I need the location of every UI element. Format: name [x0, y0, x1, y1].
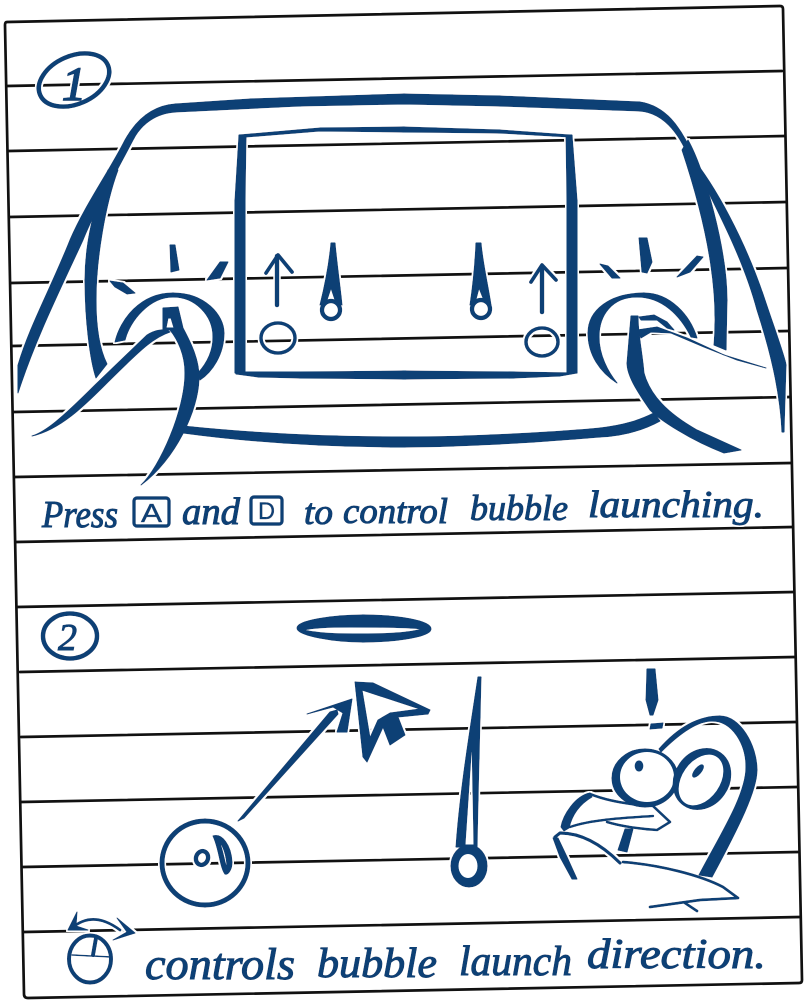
caption: controls bubble launch direction: controls	[145, 940, 295, 989]
panel 2: aiming with the mouse	[43, 614, 766, 989]
startled penguin character	[553, 716, 757, 911]
launcher needle	[451, 677, 487, 887]
caption: press A and D: control	[343, 491, 448, 531]
left bubble	[261, 323, 295, 353]
step number 2	[43, 614, 97, 659]
aiming arrow	[238, 699, 352, 821]
caption: press A and D: bubble	[470, 488, 568, 528]
caption: press A and D: A	[141, 498, 163, 528]
icon: mouse with left-right arrows	[68, 912, 135, 982]
large bubble	[162, 821, 248, 905]
caption: controls bubble launch direction: launch	[459, 939, 572, 985]
panel 1: console controls	[18, 43, 786, 536]
caption: controls bubble launch direction: direction.	[587, 932, 766, 978]
target ring	[297, 615, 431, 642]
left launcher needle	[320, 243, 342, 319]
left launch arrow	[266, 255, 292, 305]
caption: press A and D	[41, 484, 764, 536]
step number 2: 2	[58, 617, 77, 659]
caption: press A and D: D	[258, 498, 275, 525]
step number 1	[30, 43, 118, 117]
right hand pressing button D	[588, 238, 766, 453]
left hand pressing button A	[32, 245, 228, 485]
caption: controls bubble launch direction	[145, 932, 766, 989]
caption: press A and D: and	[182, 491, 241, 533]
console screen	[235, 127, 577, 379]
right launcher needle	[470, 243, 491, 318]
caption: press A and D: Press	[41, 494, 118, 536]
console outline	[18, 94, 786, 447]
mouse cursor	[355, 682, 430, 762]
caption: press A and D: launching.	[588, 484, 764, 526]
caption: press A and D: to	[304, 492, 333, 532]
exclamation mark	[646, 669, 663, 729]
right bubble	[526, 328, 558, 356]
step number 1: 1	[62, 58, 86, 111]
right launch arrow	[531, 265, 556, 312]
caption: controls bubble launch direction: bubble	[317, 941, 437, 987]
